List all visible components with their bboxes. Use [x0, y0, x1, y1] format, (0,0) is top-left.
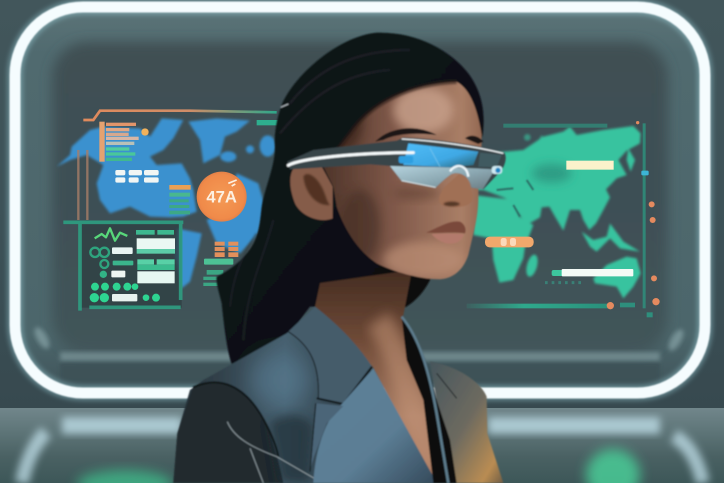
white data chips — [115, 170, 159, 183]
orange stat circle — [197, 172, 247, 222]
right holographic panel: green world map — [467, 121, 660, 317]
lapel — [313, 368, 437, 483]
neck — [314, 272, 434, 476]
axis lines — [503, 124, 607, 128]
hairline shadow — [325, 82, 457, 166]
neon frame — [15, 7, 705, 393]
face — [290, 77, 487, 283]
smart glasses — [287, 138, 506, 189]
frame — [287, 138, 506, 189]
nose — [439, 170, 473, 207]
left holographic panel: blue world map with data — [57, 111, 280, 315]
chart frame lines — [83, 111, 277, 120]
ear — [290, 165, 333, 220]
floor — [0, 408, 724, 483]
map: blue continents — [57, 118, 276, 288]
green strips lower right — [203, 259, 233, 286]
map: green continents — [470, 126, 641, 298]
sparkline — [95, 228, 127, 241]
status rings — [90, 248, 109, 268]
lower lens — [390, 166, 495, 189]
labels bars — [566, 161, 614, 170]
card bars — [111, 230, 175, 301]
lips — [426, 221, 466, 244]
jacket left and torso — [173, 307, 503, 483]
orange stat circle: 47A — [206, 188, 237, 207]
eyebrows — [375, 128, 437, 142]
dashboard card — [63, 222, 217, 315]
upper blue lens — [403, 143, 478, 167]
collar — [288, 307, 372, 404]
white light strips — [288, 153, 413, 165]
map shading — [532, 164, 572, 183]
dots grid — [90, 283, 160, 302]
blue buttons — [399, 156, 413, 163]
mid green bars — [169, 185, 191, 214]
data list top left — [99, 122, 149, 162]
status dots — [607, 121, 660, 309]
left shoulder and sleeve — [173, 307, 377, 483]
hair — [217, 33, 484, 364]
orange stacks — [215, 242, 238, 257]
woman — [173, 33, 506, 483]
right lens edge — [478, 153, 502, 167]
recessed display alcove — [15, 7, 705, 393]
right lapel and shoulder — [430, 362, 503, 483]
